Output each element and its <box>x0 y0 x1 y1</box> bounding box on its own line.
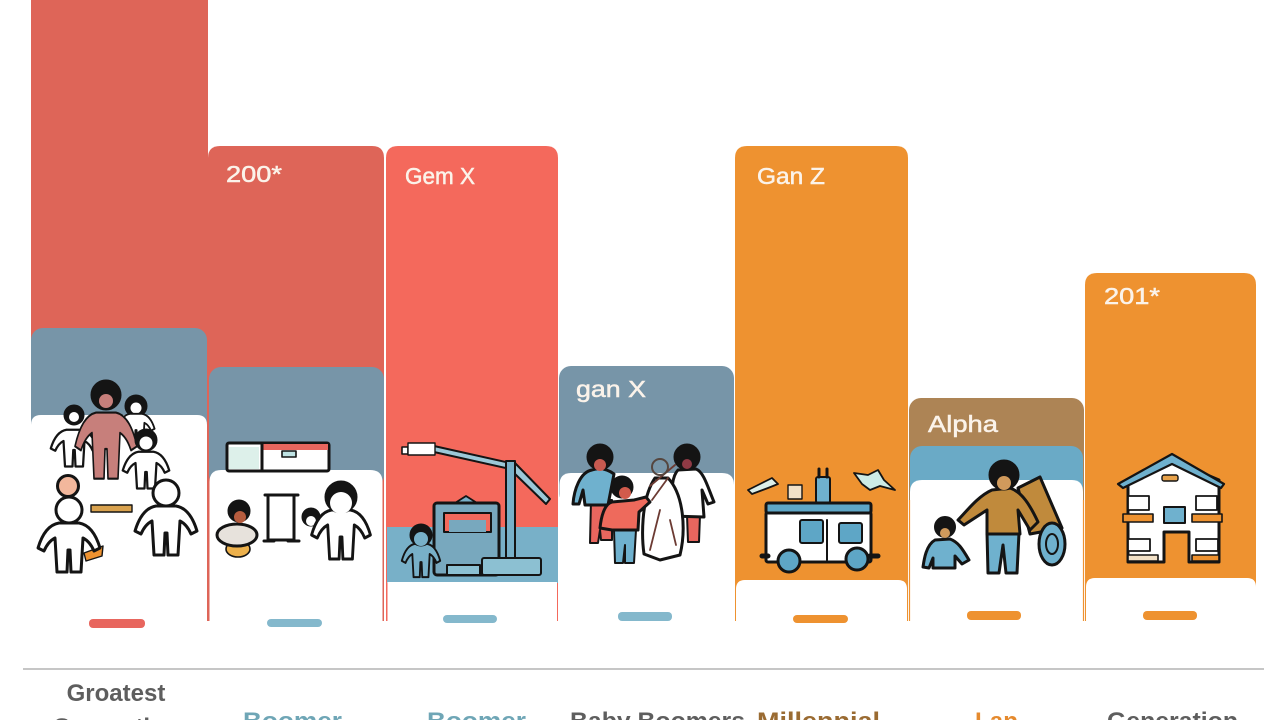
panel: Alpha bar <box>909 398 1084 621</box>
white card <box>1086 578 1256 621</box>
icon: camper van <box>748 469 895 572</box>
panel: Boomer bar <box>208 146 384 627</box>
accent pill <box>443 615 497 623</box>
accent pill <box>967 611 1021 620</box>
accent pill <box>1143 611 1197 620</box>
heading: Gan Z <box>757 163 825 189</box>
axis line <box>23 668 1264 670</box>
panel: Baby Boomers bar <box>559 366 734 621</box>
white card <box>560 473 734 621</box>
accent pill <box>267 619 322 627</box>
accent pill <box>793 615 848 623</box>
heading: 200* <box>226 161 282 187</box>
icon: family <box>573 445 714 563</box>
slate band <box>209 367 384 487</box>
white card <box>910 480 1083 621</box>
icon: crane and machine <box>402 443 550 577</box>
accent pill <box>89 619 145 628</box>
heading: Alpha <box>928 411 998 437</box>
white card <box>736 580 907 621</box>
heading: gan X <box>576 376 646 402</box>
blue band <box>910 446 1083 516</box>
panel: Boomer bar 2 <box>386 146 558 623</box>
panel: Generation bar <box>1085 273 1256 621</box>
labels row <box>53 680 1238 720</box>
icon: people with stool and chest <box>217 443 370 559</box>
edge lines <box>910 500 1084 621</box>
panel: Millennial bar <box>735 146 908 623</box>
heading: 201* <box>1104 283 1160 309</box>
slate band <box>31 328 207 438</box>
accent pill <box>618 612 672 621</box>
label: Greatest Generation: Groatest <box>67 680 165 707</box>
icon: adult and child <box>923 461 1065 573</box>
white card <box>31 415 207 621</box>
white card <box>388 582 557 621</box>
white card <box>210 470 382 621</box>
blue band <box>387 527 558 583</box>
heading: Gem X <box>405 163 475 189</box>
panel: Greatest Generation bar <box>31 0 208 628</box>
icon: house <box>1118 454 1224 562</box>
icon: group of people <box>38 381 197 572</box>
